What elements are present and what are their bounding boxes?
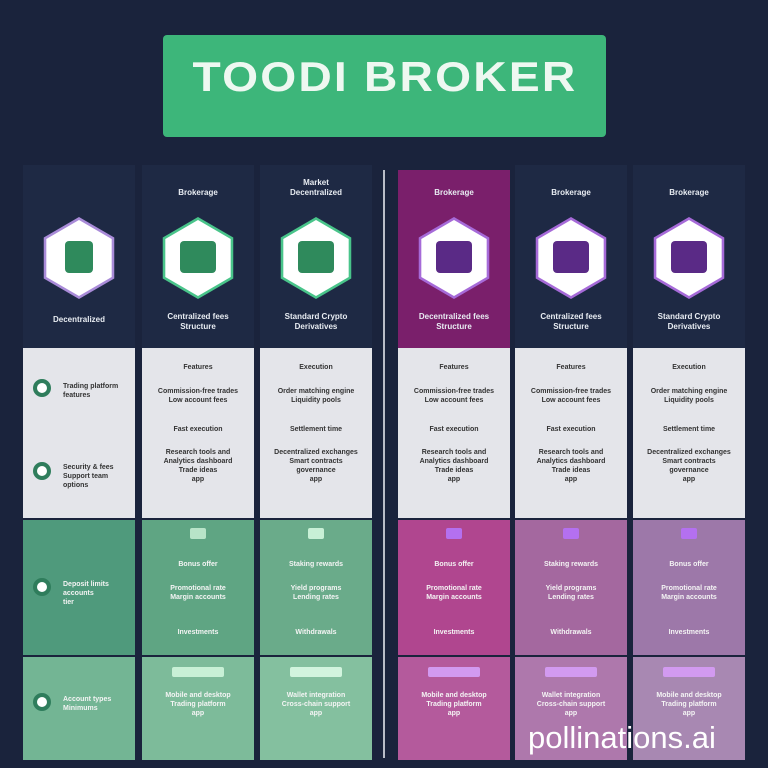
column 1: Decentralized [53, 315, 105, 324]
column 3: Smart contracts [289, 458, 343, 465]
column 3: Standard Crypto [285, 312, 347, 321]
column 6: Smart contracts [662, 458, 716, 465]
column 6: Margin accounts [661, 594, 717, 601]
column 2 [142, 188, 254, 760]
column 5: Wallet integration [542, 692, 600, 699]
column 2: app [192, 476, 204, 483]
column 5: Trade ideas [552, 467, 590, 474]
column 3: app [310, 710, 322, 717]
column 4: Structure [436, 322, 472, 331]
column 5 [515, 188, 627, 760]
column 5: Features [556, 364, 586, 371]
column 6: Investments [669, 629, 709, 636]
column 2: Features [183, 364, 213, 371]
column 2: Commission-free trades [158, 388, 238, 395]
column 6: Order matching engine [651, 388, 727, 395]
column 3: Derivatives [295, 322, 337, 331]
column 4: Commission-free trades [414, 388, 494, 395]
column 6: Brokerage [669, 188, 709, 197]
title banner: TOODI BROKER [192, 53, 577, 100]
column 4: Brokerage [434, 188, 474, 197]
column 2: Analytics dashboard [164, 458, 232, 465]
column 4: app [448, 476, 460, 483]
column 2: Fast execution [173, 426, 222, 433]
watermark: pollinations.ai [528, 720, 716, 755]
column 4: Decentralized fees [419, 312, 489, 321]
column 3: Cross-chain support [282, 701, 350, 708]
column 5: Centralized fees [540, 312, 602, 321]
column 6: Settlement time [663, 426, 715, 433]
column 5: Commission-free trades [531, 388, 611, 395]
column 2: Centralized fees [167, 312, 229, 321]
column 3: Liquidity pools [291, 397, 341, 404]
rows [33, 379, 51, 397]
divider line [383, 170, 385, 758]
column 1: options [63, 482, 88, 489]
column 4: Research tools and [422, 449, 486, 456]
column 5: Analytics dashboard [537, 458, 605, 465]
column 4: Features [439, 364, 469, 371]
column 1: Account types [63, 696, 111, 703]
column 5: Brokerage [551, 188, 591, 197]
column 3: Market [303, 178, 329, 187]
column 5: Structure [553, 322, 589, 331]
column 3: Settlement time [290, 426, 342, 433]
column 5: Low account fees [542, 397, 600, 404]
column 5: Fast execution [546, 426, 596, 433]
column 4: Promotional rate [426, 585, 482, 592]
column 5: Withdrawals [550, 629, 592, 636]
column 4: app [448, 710, 460, 717]
column 2: Structure [180, 322, 216, 331]
column 1 [23, 217, 135, 760]
column 2: Investments [178, 629, 218, 636]
column 2: Brokerage [178, 188, 218, 197]
column 3: Decentralized [290, 188, 342, 197]
column 6 [633, 188, 745, 760]
column 1: Trading platform [63, 383, 118, 390]
column 3: Yield programs [291, 585, 341, 592]
column 4: Trading platform [426, 701, 482, 708]
column 2: Low account fees [169, 397, 227, 404]
column 2: Margin accounts [170, 594, 226, 601]
column 4: Trade ideas [435, 467, 473, 474]
column 3: governance [296, 467, 336, 474]
column 2: Bonus offer [178, 561, 218, 568]
column 6: Standard Crypto [658, 312, 720, 321]
column 3: Decentralized exchanges [274, 449, 358, 456]
column 1: accounts [63, 590, 94, 597]
column 6: Mobile and desktop [656, 692, 722, 699]
column 4 [398, 170, 510, 760]
column 5: Cross-chain support [537, 701, 605, 708]
column 6: Decentralized exchanges [647, 449, 731, 456]
column 3: app [310, 476, 322, 483]
column 4: Fast execution [429, 426, 478, 433]
column 5: Yield programs [546, 585, 596, 592]
column 3: Order matching engine [278, 388, 354, 395]
column 3: Lending rates [293, 594, 339, 601]
column 4: Margin accounts [426, 594, 482, 601]
column 2: Mobile and desktop [165, 692, 231, 699]
column 5: app [565, 476, 577, 483]
column 2: Trading platform [170, 701, 226, 708]
column 6: Promotional rate [661, 585, 717, 592]
column 2: Research tools and [166, 449, 230, 456]
column 6: Derivatives [668, 322, 710, 331]
column 5: Staking rewards [544, 561, 598, 568]
column 3: Wallet integration [287, 692, 345, 699]
column 1: Security & fees [63, 464, 114, 471]
column 5: app [565, 710, 577, 717]
column 6: Bonus offer [669, 561, 709, 568]
column 6: Execution [672, 364, 706, 371]
column 4: Investments [434, 629, 474, 636]
column 3: Execution [299, 364, 333, 371]
icon 1 [65, 241, 93, 273]
column 4: Mobile and desktop [421, 692, 487, 699]
column 3: Staking rewards [289, 561, 343, 568]
column 2: Promotional rate [170, 585, 226, 592]
column 1: Support team [63, 473, 108, 480]
column 6: Liquidity pools [664, 397, 714, 404]
column 1: tier [63, 599, 74, 606]
column 5: Lending rates [548, 594, 594, 601]
column 2: Trade ideas [179, 467, 217, 474]
column 2: app [192, 710, 204, 717]
column 6: app [683, 476, 695, 483]
column 4: Bonus offer [434, 561, 474, 568]
column 3: Withdrawals [295, 629, 337, 636]
column 1: Minimums [63, 705, 98, 712]
column 6: Trading platform [661, 701, 717, 708]
column 1: features [63, 392, 90, 399]
title banner [163, 35, 606, 137]
column 5: Research tools and [539, 449, 603, 456]
column 6: app [683, 710, 695, 717]
column 3 [260, 178, 372, 760]
column 6: governance [669, 467, 709, 474]
column 4: Analytics dashboard [420, 458, 488, 465]
column 1: Deposit limits [63, 581, 109, 588]
column 4: Low account fees [425, 397, 483, 404]
